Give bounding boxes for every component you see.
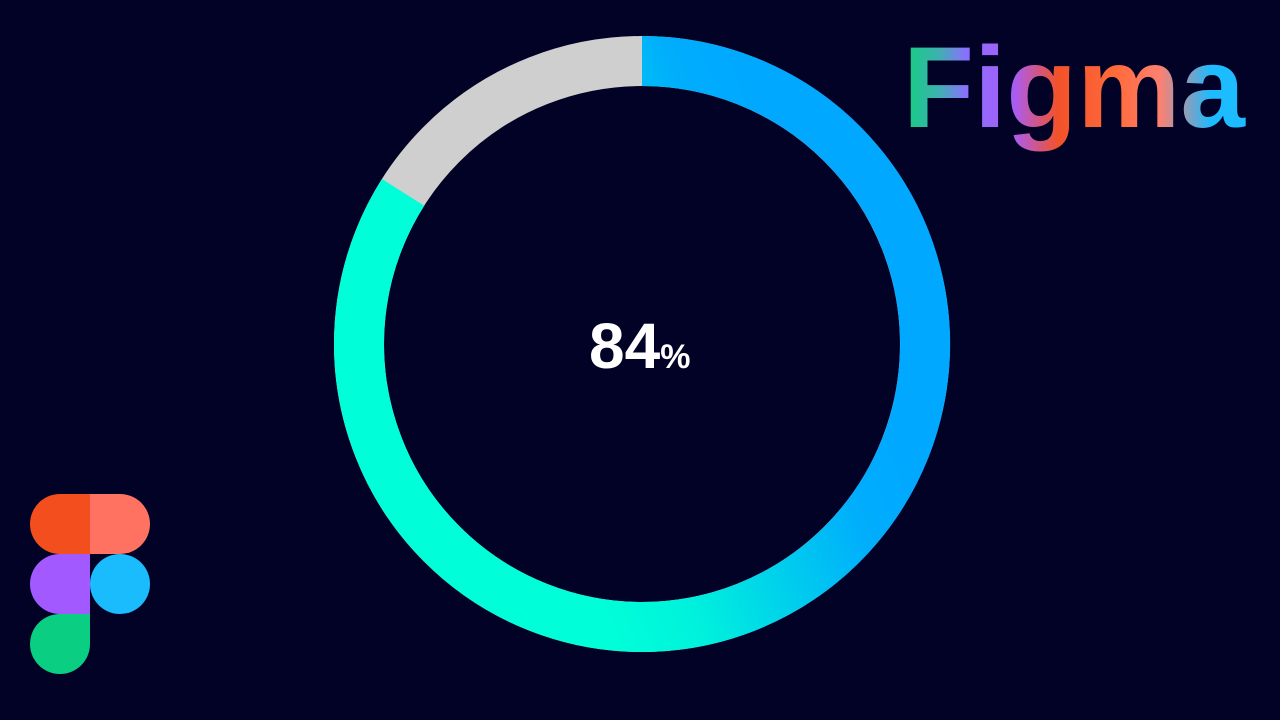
donut chart [359,61,925,627]
Figma wordmark: Figma [903,24,1246,152]
icon: figma logo [30,494,150,674]
remaining gray segment [359,61,925,627]
percentage label: 84% [589,310,690,382]
progress arc 84% [359,61,925,627]
